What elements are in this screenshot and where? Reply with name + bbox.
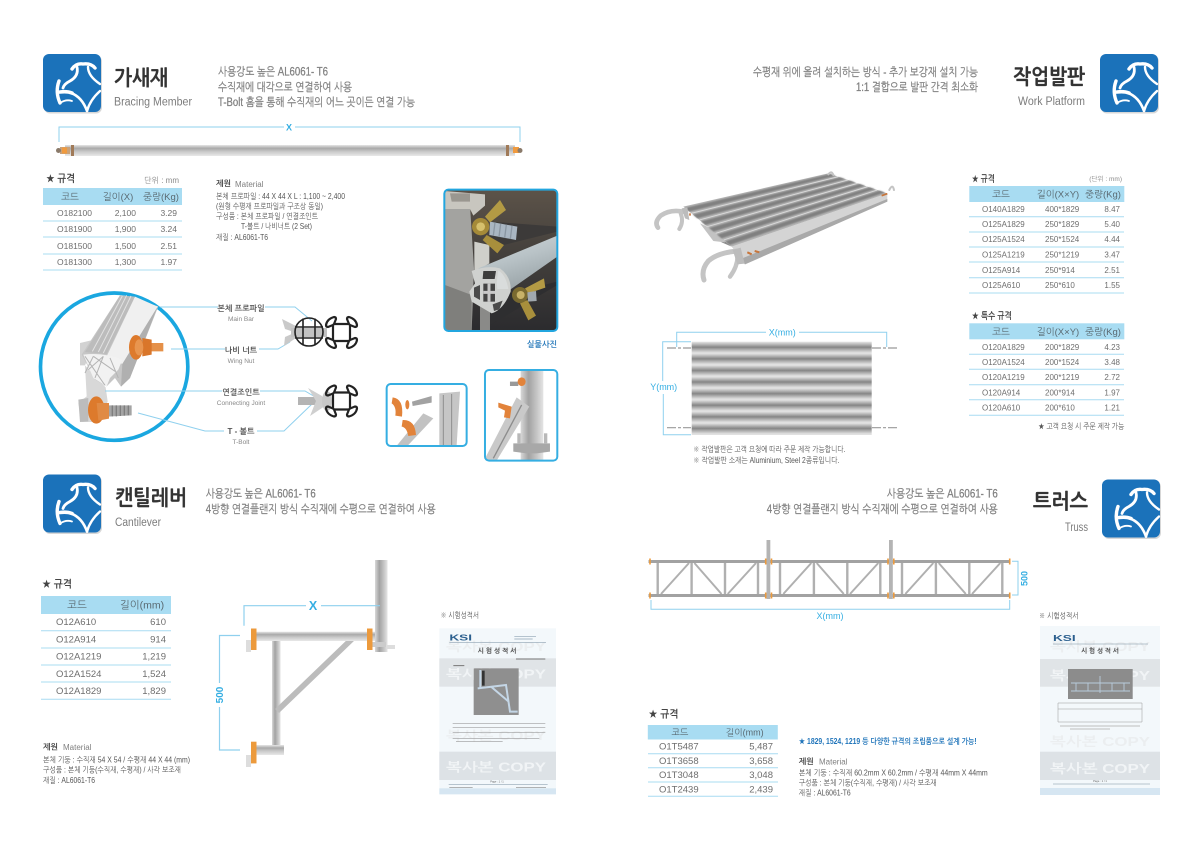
document: cantilever test report: KSI	[449, 634, 472, 643]
text block: bracing description	[218, 66, 415, 109]
illustration: 3D work platform	[656, 172, 894, 280]
table: truss specifications: 3,048	[749, 770, 773, 781]
document: cantilever test report: 복사본 COPY	[446, 640, 547, 654]
text block: work platform notes: ※ 작업발판은 고객 요청에 따라 주문 제작 가능합니다.	[693, 445, 845, 454]
table: special specifications: O120A1524	[982, 358, 1025, 367]
table: special specifications: O120A914	[982, 388, 1021, 398]
table: truss specifications: O1T5487	[659, 742, 699, 752]
table: bracing specifications: 2.51	[160, 241, 177, 251]
callout: modular design note: ★ 1829, 1524, 1219 등 다양한 규격의 조립품으로 설계 가능!	[799, 737, 977, 746]
text block: cantilever description: 사용강도 높은 AL6061- T6	[206, 488, 316, 500]
table: bracing specifications: ★ 규격	[46, 173, 75, 185]
table: bracing specifications: 코드	[61, 192, 79, 203]
heading: bracing member	[114, 67, 192, 108]
table: bracing specifications: 1,300	[115, 257, 136, 267]
table: cantilever specifications: O12A610	[56, 617, 96, 628]
text block: cantilever description: 4방향 연결플랜지 방식 수직재에 수평으로 연결하여 사용	[206, 503, 436, 516]
text block: bracing description: 수직재에 대각으로 연결하여 사용	[218, 81, 352, 94]
table: special specifications: 길이(X×Y)	[1037, 327, 1079, 338]
table: cantilever specifications: 1,219	[142, 652, 166, 662]
table: bracing specifications: 1,500	[115, 241, 136, 251]
document: cantilever test report	[439, 628, 556, 794]
table: work platform specifications: 중량(Kg)	[1085, 190, 1121, 200]
text block: work platform description: 1:1 결합으로 발판 간격 최소화	[856, 81, 978, 94]
icon: cantilever logo	[43, 474, 102, 534]
table: bracing specifications: 1,900	[115, 224, 136, 234]
note: custom order: ★ 고객 요청 시 주문 제작 가능	[1038, 422, 1125, 431]
section: work platform	[650, 54, 1159, 465]
table: cantilever specifications: O12A1524	[56, 669, 101, 680]
table: work platform specifications: 8.47	[1104, 205, 1121, 214]
table: truss specifications: O1T2439	[659, 784, 699, 796]
table: bracing specifications: O181300	[57, 257, 92, 267]
table: work platform specifications: O125A914	[982, 266, 1021, 275]
section: bracing member	[40, 54, 557, 461]
heading: cantilever: 캔틸레버	[115, 487, 187, 510]
table: cantilever specifications: 길이(mm)	[120, 600, 164, 612]
table: work platform specifications: 5.40	[1104, 220, 1121, 229]
table: work platform specifications: 길이(X×Y)	[1037, 190, 1079, 200]
table: cantilever specifications: O12A1829	[56, 686, 101, 697]
table: cantilever specifications: ★ 규격	[42, 578, 72, 590]
document: cantilever test report: 시 험 성 적 서	[478, 647, 516, 655]
document: truss test report: 복사본 COPY	[1050, 761, 1150, 776]
icon: truss logo	[1102, 480, 1161, 539]
text block: cantilever material: 구성품 : 본체 기둥(수직재, 수평재) / 사각 보조재	[43, 766, 181, 774]
chart: work platform plan with dimensions: Y(mm)	[650, 382, 677, 392]
illustration: magnified joint circle	[40, 293, 188, 440]
heading: bracing member: 가새재	[114, 67, 168, 90]
table: special specifications	[969, 310, 1124, 415]
table: bracing specifications: O181500	[57, 241, 92, 251]
document: truss test report	[1040, 626, 1160, 795]
labels: joint parts with leader lines: 본체 프로파일	[217, 304, 265, 313]
text block: truss description	[767, 488, 998, 516]
table: cantilever specifications: O12A1219	[56, 652, 101, 662]
table: truss specifications: ★ 규격	[648, 708, 678, 720]
table: bracing specifications: 3.29	[160, 208, 177, 218]
table: special specifications: 1.97	[1104, 388, 1121, 398]
text block: cantilever material: 재질 : AL6061-T6	[43, 776, 95, 785]
heading: cantilever: Cantilever	[115, 517, 161, 529]
table: truss specifications: O1T3658	[659, 756, 699, 767]
text block: truss material: 본체 기둥 : 수직재 60.2mm X 60.2mm / 수평재 44mm X 44mm	[799, 768, 988, 778]
text block: cantilever material	[43, 742, 190, 785]
table: special specifications: 4.23	[1104, 343, 1121, 352]
chart: truss drawing with dimensions	[648, 540, 1030, 621]
caption: real photo: 실물사진	[527, 340, 557, 349]
table: truss specifications	[648, 708, 778, 796]
table: bracing specifications: O182100	[57, 208, 92, 218]
table: truss specifications: O1T3048	[659, 770, 699, 781]
table: cantilever specifications	[41, 578, 171, 699]
heading: work platform	[1013, 66, 1085, 108]
document: truss test report: 시 험 성 적 서	[1081, 647, 1119, 655]
text block: bracing material: 구성품 : 본체 프로파일 / 연결조인트	[216, 212, 318, 221]
heading: work platform: 작업발판	[1013, 66, 1085, 89]
table: truss specifications: 길이(mm)	[726, 728, 764, 738]
labels: joint parts with leader lines	[105, 304, 322, 446]
table: cantilever specifications: 코드	[67, 600, 87, 612]
table: work platform specifications: O140A1829	[982, 205, 1025, 214]
table: cantilever specifications: 914	[150, 634, 166, 646]
heading: work platform: Work Platform	[1018, 96, 1085, 108]
labels: joint parts with leader lines: Wing Nut	[228, 358, 255, 365]
text block: bracing material: 본체 프로파일 : 44 X 44 X L : 1,100 ~ 2,400	[216, 192, 345, 201]
heading: truss: Truss	[1065, 522, 1088, 534]
chart: work platform plan with dimensions: X(mm)	[769, 328, 796, 338]
heading: truss: 트러스	[1033, 490, 1088, 514]
text block: bracing description: T-Bolt 홈을 통해 수직재의 어느 곳이든 연결 가능	[218, 96, 415, 109]
table: special specifications: 200*610	[1045, 404, 1075, 412]
table: special specifications: 중량(Kg)	[1085, 327, 1121, 338]
text block: bracing material: 제원	[216, 179, 231, 188]
document: truss test report: 복사본 COPY	[1050, 668, 1150, 683]
document: cantilever test report: 복사본 COPY	[446, 761, 547, 775]
heading: cantilever	[115, 487, 187, 529]
table: bracing specifications: 단위 : mm	[144, 176, 179, 185]
table: work platform specifications	[969, 173, 1124, 293]
text block: work platform description	[753, 66, 978, 94]
table: work platform specifications: 250*1829	[1045, 220, 1080, 229]
text block: truss material: 제원	[799, 757, 814, 766]
text block: truss material	[799, 757, 988, 798]
chart: cantilever drawing with dimensions: 500	[215, 686, 226, 703]
table: work platform specifications: (단위 : mm)	[1089, 175, 1122, 183]
text block: work platform description: 수평재 위에 올려 설치하는 방식 - 추가 보강재 설치 가능	[753, 66, 978, 79]
table: work platform specifications: ★ 규격	[972, 173, 995, 185]
table: bracing specifications: 1.97	[160, 257, 177, 267]
table: bracing specifications: 중량(Kg)	[143, 192, 179, 203]
text block: bracing material: 재질 : AL6061-T6	[216, 233, 268, 242]
heading: bracing member: Bracing Member	[114, 96, 192, 108]
table: special specifications: 200*1524	[1045, 358, 1080, 367]
document: cantilever test report: 복사본 COPY	[446, 729, 547, 743]
table: work platform specifications: 250*1524	[1045, 235, 1080, 244]
table: truss specifications: 3,658	[749, 756, 773, 767]
text block: bracing material	[216, 179, 345, 242]
table: work platform specifications: 250*1219	[1045, 250, 1080, 260]
table: bracing specifications: O181900	[57, 224, 92, 234]
text block: bracing material: T-볼트 / 나비너트 (2 Set)	[241, 222, 312, 231]
icon: work platform logo	[1100, 54, 1159, 114]
table: cantilever specifications: 1,524	[142, 669, 166, 680]
document: truss test report: 복사본 COPY	[1050, 734, 1150, 749]
document: cantilever test report: Page : 1 / 1	[490, 779, 504, 783]
table: work platform specifications: O125A1524	[982, 235, 1025, 244]
table: work platform specifications: 4.44	[1104, 235, 1121, 244]
illustration: exploded joint box	[387, 384, 467, 446]
table: bracing specifications	[43, 173, 182, 270]
document: truss test report: Page : 1 / 1	[1093, 779, 1107, 783]
table: work platform specifications: 250*610	[1045, 281, 1075, 290]
chart: bracing bar with X dimension: X	[286, 122, 292, 132]
table: work platform specifications: 2.51	[1104, 266, 1121, 275]
text block: cantilever description	[206, 488, 436, 516]
text block: bracing material: Material	[235, 180, 264, 189]
text block: truss material: 재질 : AL6061-T6	[799, 788, 851, 798]
table: special specifications: 200*1829	[1045, 343, 1080, 352]
text block: work platform notes	[693, 445, 845, 465]
table: special specifications: O120A610	[982, 404, 1021, 412]
table: special specifications: 3.48	[1104, 358, 1121, 367]
chart: work platform plan with dimensions	[650, 328, 897, 435]
text block: truss description: 4방향 연결플랜지 방식 수직재에 수평으로 연결하여 사용	[767, 503, 998, 516]
labels: joint parts with leader lines: 연결조인트	[222, 388, 260, 397]
document: truss test report: 복사본 COPY	[1050, 639, 1150, 654]
table: special specifications: 200*1219	[1045, 373, 1080, 382]
table: work platform specifications: 400*1829	[1045, 205, 1080, 214]
table: work platform specifications: 1.55	[1104, 281, 1121, 290]
photo: assembled bracing joint	[444, 190, 557, 331]
labels: joint parts with leader lines: Connecting Joint	[217, 400, 265, 407]
table: work platform specifications: O125A610	[982, 281, 1021, 290]
chart: cantilever drawing with dimensions: X	[309, 599, 318, 613]
table: special specifications: 1.21	[1104, 404, 1121, 412]
table: special specifications: O120A1219	[982, 373, 1025, 382]
table: special specifications: O120A1829	[982, 343, 1025, 352]
illustration: assembled joint box	[485, 370, 557, 461]
table: cantilever specifications: O12A914	[56, 634, 96, 646]
text block: cantilever material: 제원	[43, 742, 58, 752]
document: cantilever test report: 복사본 COPY	[446, 667, 547, 681]
label: test report: ※ 시험성적서	[1039, 612, 1078, 621]
section: cantilever	[41, 474, 556, 794]
table: truss specifications: 2,439	[749, 784, 773, 796]
chart: truss drawing with dimensions: 500	[1020, 571, 1030, 586]
chart: truss drawing with dimensions: X(mm)	[816, 611, 844, 621]
table: work platform specifications: 3.47	[1104, 250, 1121, 260]
text block: truss description: 사용강도 높은 AL6061- T6	[887, 488, 998, 500]
table: special specifications: 2.72	[1104, 373, 1121, 382]
labels: joint parts with leader lines: 나비 너트	[225, 346, 258, 355]
text block: work platform notes: ※ 작업발판 소재는 Aluminium, Steel 2종류입니다.	[693, 456, 839, 465]
heading: truss	[1033, 490, 1088, 534]
text block: cantilever material: Material	[63, 743, 92, 752]
table: bracing specifications: 2,100	[115, 208, 136, 218]
label: test report: ※ 시험성적서	[440, 611, 479, 620]
text block: bracing material: (원형 수평재 프로파일과 구조상 동일)	[216, 202, 323, 211]
table: work platform specifications: 코드	[992, 190, 1010, 200]
icon: connecting joint cross-section	[298, 386, 357, 416]
table: special specifications: ★ 특수 규격	[972, 310, 1012, 322]
table: work platform specifications: 250*914	[1045, 266, 1075, 275]
text block: truss material: Material	[819, 758, 848, 766]
table: work platform specifications: O125A1219	[982, 250, 1025, 260]
icon: bracing logo	[43, 54, 102, 114]
section: truss	[648, 480, 1161, 798]
table: bracing specifications: 길이(X)	[103, 192, 133, 203]
labels: joint parts with leader lines: T-Bolt	[233, 439, 250, 446]
labels: joint parts with leader lines: T - 볼트	[227, 427, 255, 436]
text block: bracing description: 사용강도 높은 AL6061- T6	[218, 66, 328, 78]
document: truss test report: KSI	[1053, 634, 1076, 643]
table: truss specifications: 코드	[672, 728, 689, 738]
table: bracing specifications: 3.24	[160, 224, 177, 234]
table: special specifications: 코드	[992, 327, 1010, 338]
icon: main bar cross-section	[282, 317, 357, 348]
chart: bracing bar with X dimension	[56, 122, 522, 156]
labels: joint parts with leader lines: Main Bar	[228, 316, 255, 323]
table: special specifications: 200*914	[1045, 388, 1075, 398]
text block: cantilever material: 본체 기둥 : 수직재 54 X 54 / 수평재 44 X 44 (mm)	[43, 756, 190, 764]
table: cantilever specifications: 1,829	[142, 686, 166, 697]
table: work platform specifications: O125A1829	[982, 220, 1025, 229]
table: truss specifications: 5,487	[749, 742, 773, 752]
text block: truss material: 구성품 : 본체 기둥(수직재, 수평재) / 사각 보조재	[799, 778, 937, 788]
chart: cantilever drawing with dimensions	[215, 560, 395, 767]
table: cantilever specifications: 610	[150, 617, 166, 628]
